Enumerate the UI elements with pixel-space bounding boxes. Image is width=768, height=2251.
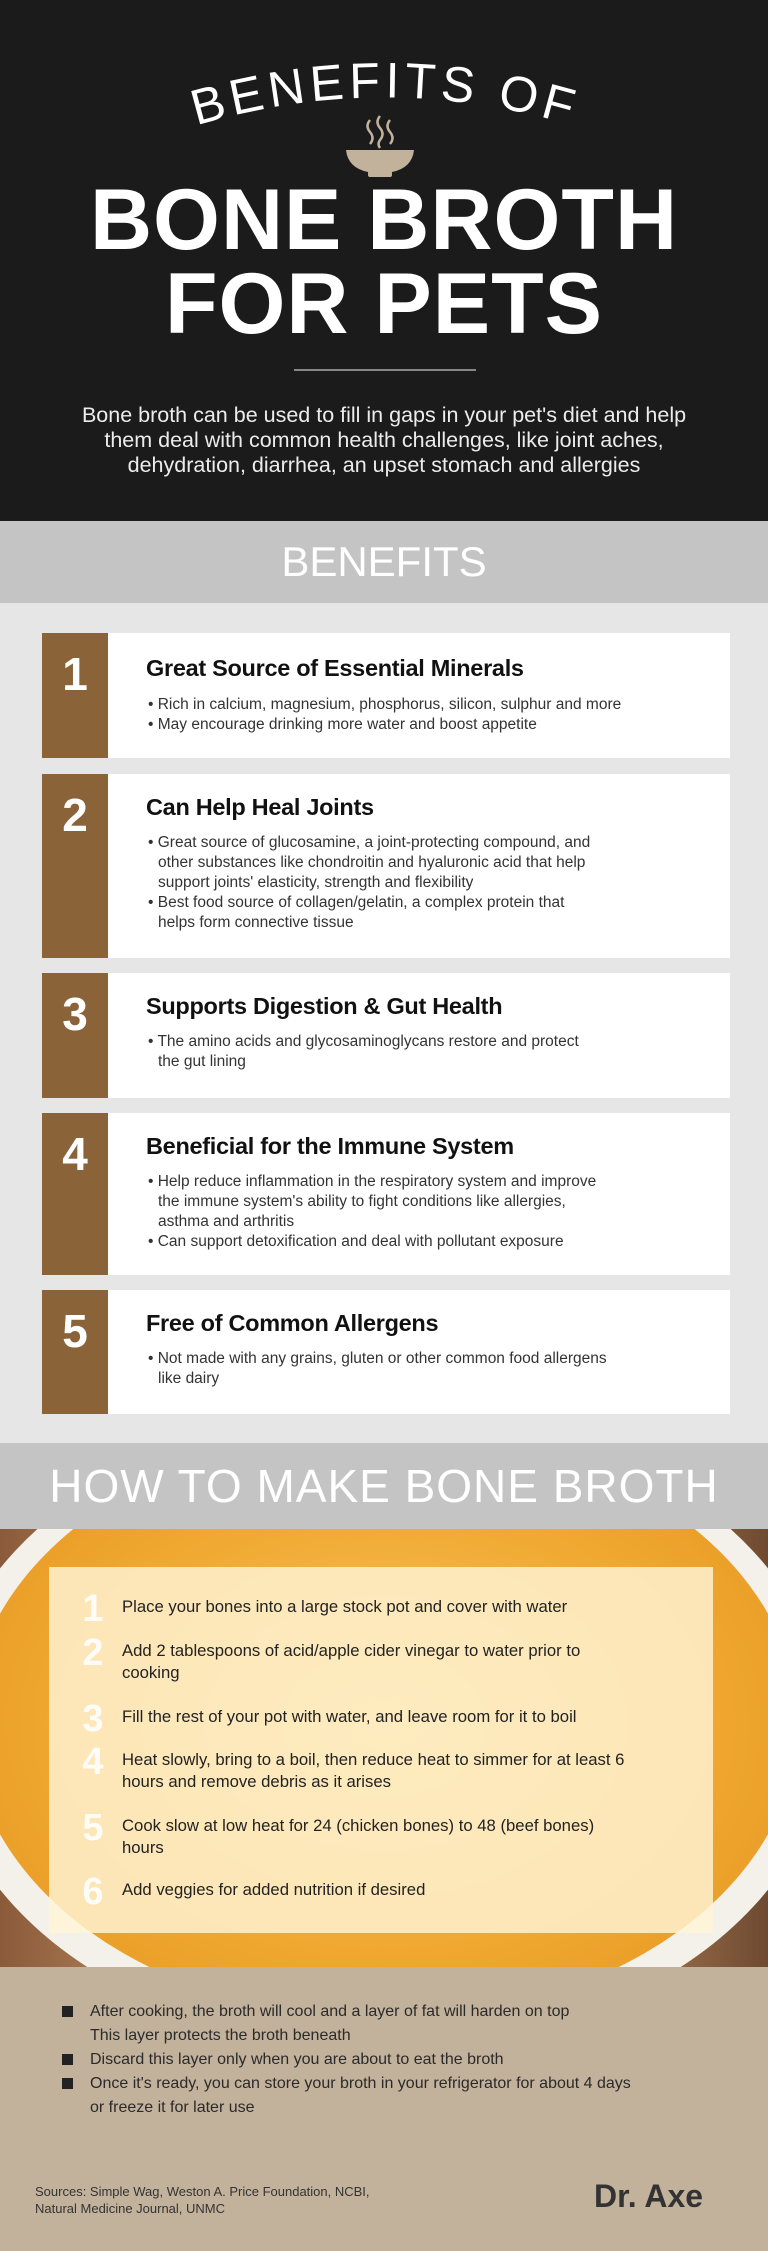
arched title: benefits of: BENEFITS OF	[191, 63, 576, 124]
step 2	[82, 1632, 580, 1682]
card 1	[42, 633, 730, 758]
main title	[90, 172, 678, 352]
storage tips list	[62, 2003, 631, 2116]
step 4	[82, 1741, 624, 1791]
intro text	[82, 403, 686, 477]
card 3: 3	[62, 988, 88, 1040]
step 1: 1	[82, 1588, 104, 1630]
step 1	[82, 1588, 567, 1630]
card 1: • Rich in calcium, magnesium, phosphorus, silicon, sulphur and more	[148, 696, 621, 713]
step 3: 3	[82, 1698, 104, 1740]
intro text: dehydration, diarrhea, an upset stomach and allergies	[128, 453, 640, 477]
card 4: the immune system's ability to fight conditions like allergies,	[158, 1193, 566, 1210]
step 3: Fill the rest of your pot with water, and leave room for it to boil	[122, 1707, 576, 1726]
storage tips list: After cooking, the broth will cool and a layer of fat will harden on top	[90, 2003, 569, 2020]
tan footer panel	[0, 1967, 768, 2251]
card 2 title: Can Help Heal Joints	[146, 794, 374, 820]
main title: FOR PETS	[165, 256, 603, 352]
storage tips list: Once it's ready, you can store your broth in your refrigerator for about 4 days	[90, 2075, 631, 2092]
step 5: hours	[122, 1838, 164, 1857]
card 1: • May encourage drinking more water and boost appetite	[148, 716, 537, 733]
card 2: • Great source of glucosamine, a joint-protecting compound, and	[148, 834, 590, 851]
benefits heading band: BENEFITS	[281, 538, 487, 585]
card 2: 2	[62, 789, 88, 841]
card 4: 4	[62, 1128, 88, 1180]
steps list	[82, 1588, 624, 1913]
card 5	[42, 1290, 730, 1414]
card 5: • Not made with any grains, gluten or other common food allergens	[148, 1350, 607, 1367]
card 4: • Can support detoxification and deal with pollutant exposure	[148, 1233, 564, 1250]
step 4: Heat slowly, bring to a boil, then reduce heat to simmer for at least 6	[122, 1750, 624, 1769]
card 5 title: Free of Common Allergens	[146, 1310, 438, 1336]
photo background: broth bowl	[0, 1529, 768, 1967]
step 4: 4	[82, 1741, 104, 1783]
sources	[35, 2184, 370, 2216]
benefits heading band	[0, 521, 768, 603]
storage tips list: Discard this layer only when you are about to eat the broth	[90, 2051, 504, 2068]
sources: Natural Medicine Journal, UNMC	[35, 2201, 225, 2216]
card 2: • Best food source of collagen/gelatin, a complex protein that	[148, 894, 564, 911]
card 4 title: Beneficial for the Immune System	[146, 1133, 514, 1159]
step 6	[82, 1871, 425, 1913]
card 2: other substances like chondroitin and hyaluronic acid that help	[158, 854, 585, 871]
step 6: Add veggies for added nutrition if desired	[122, 1880, 425, 1899]
card 2: helps form connective tissue	[158, 914, 354, 931]
storage tips list: This layer protects the broth beneath	[90, 2027, 351, 2044]
storage tips list: or freeze it for later use	[90, 2099, 255, 2116]
step 5: 5	[82, 1807, 104, 1849]
card 5: like dairy	[158, 1370, 219, 1387]
main title: BONE BROTH	[90, 172, 678, 268]
card 1 title: Great Source of Essential Minerals	[146, 655, 524, 681]
step 5: Cook slow at low heat for 24 (chicken bones) to 48 (beef bones)	[122, 1816, 594, 1835]
steps box	[49, 1567, 713, 1933]
card 2: support joints' elasticity, strength and flexibility	[158, 874, 473, 891]
sources: Sources: Simple Wag, Weston A. Price Foundation, NCBI,	[35, 2184, 370, 2199]
how to make heading band	[0, 1443, 768, 1529]
step 6: 6	[82, 1871, 104, 1913]
card 4: • Help reduce inflammation in the respiratory system and improve	[148, 1173, 596, 1190]
card 4	[42, 1113, 730, 1275]
icon: steaming bowl	[346, 115, 414, 177]
logo: Dr. Axe: Dr. Axe	[594, 2178, 703, 2214]
card 5: 5	[62, 1305, 88, 1357]
card 3 title: Supports Digestion & Gut Health	[146, 993, 502, 1019]
card 1: 1	[62, 648, 88, 700]
step 2: Add 2 tablespoons of acid/apple cider vinegar to water prior to	[122, 1641, 580, 1660]
card 3	[42, 973, 730, 1098]
card 4: asthma and arthritis	[158, 1213, 294, 1230]
step 4: hours and remove debris as it arises	[122, 1772, 391, 1791]
intro text: them deal with common health challenges, like joint aches,	[104, 428, 664, 452]
step 5	[82, 1807, 594, 1857]
card 2	[42, 774, 730, 958]
step 2: cooking	[122, 1663, 180, 1682]
step 1: Place your bones into a large stock pot and cover with water	[122, 1597, 567, 1616]
step 2: 2	[82, 1632, 104, 1674]
card 3: the gut lining	[158, 1053, 246, 1070]
how to make heading band: HOW TO MAKE BONE BROTH	[49, 1460, 719, 1512]
card 3: • The amino acids and glycosaminoglycans restore and protect	[148, 1033, 579, 1050]
intro text: Bone broth can be used to fill in gaps in your pet's diet and help	[82, 403, 686, 427]
header panel	[0, 0, 768, 521]
step 3	[82, 1698, 576, 1740]
